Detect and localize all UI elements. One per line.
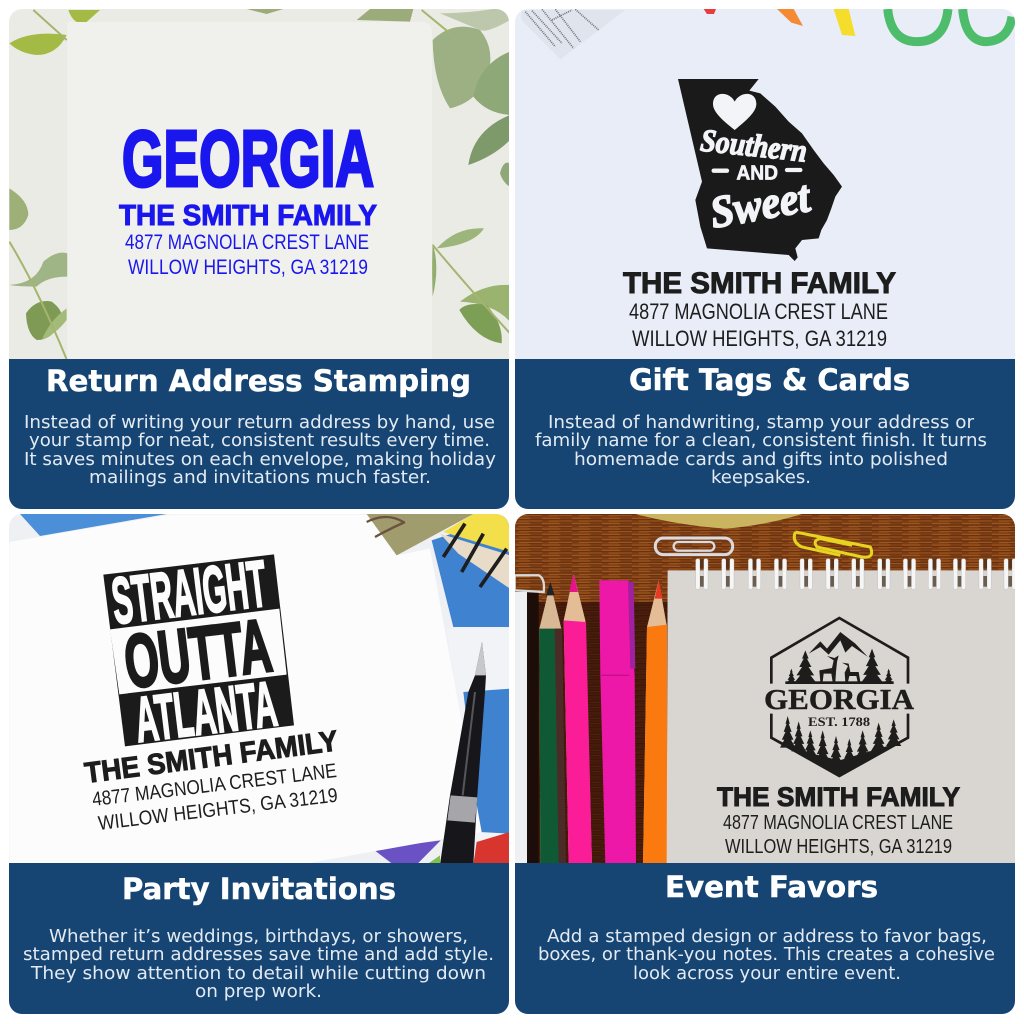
dash marks [712, 168, 802, 173]
word: ATLANTA: ATLANTA [131, 667, 281, 756]
address line 1: 4877 MAGNOLIA CREST LANE [91, 760, 338, 811]
panel: gift tags and cards [515, 9, 1016, 509]
panel: party invitations [9, 514, 510, 1014]
white band [110, 609, 287, 694]
lettering: AND: AND [736, 161, 778, 184]
notebook spiral binding [696, 559, 1016, 589]
description text [24, 412, 496, 488]
description text: boxes, or thank-you notes. This creates a cohesive [538, 944, 995, 965]
family name: THE SMITH FAMILY [717, 782, 960, 812]
stamp artwork: Straight Outta Atlanta [103, 554, 294, 746]
icon: Georgia state stamp with Southern and Sweet [678, 79, 842, 261]
state silhouette [678, 79, 842, 261]
description text: Instead of handwriting, stamp your address or [548, 412, 975, 433]
caption band [515, 359, 1015, 509]
address line 1: 4877 MAGNOLIA CREST LANE [723, 812, 953, 834]
stamp address block [623, 267, 896, 351]
description text: Add a stamped design or address to favor bags, [547, 926, 987, 947]
panel: party invitations: STRAIGHT [108, 546, 271, 638]
address line 2: WILLOW HEIGHTS, GA 31219 [632, 326, 887, 351]
address line 2: WILLOW HEIGHTS, GA 31219 [97, 785, 339, 835]
heading: Gift Tags & Cards [629, 363, 910, 397]
description text [538, 926, 995, 984]
description text: Whether it’s weddings, birthdays, or showers, [49, 926, 468, 947]
address line 2: WILLOW HEIGHTS, GA 31219 [725, 836, 952, 858]
photo: desk with ruler, pens and scissors [515, 9, 1016, 360]
stamp imprint: blue Georgia address [119, 114, 377, 279]
family name: THE SMITH FAMILY [623, 267, 896, 300]
caption band [9, 359, 509, 509]
heading: Event Favors [665, 870, 878, 904]
description text: homemade cards and gifts into polished [574, 449, 948, 470]
description text [535, 412, 987, 488]
lettering: Sweet: Sweet [706, 171, 815, 238]
icon: hexagon mountain and deer badge [771, 618, 908, 777]
hexagon outline [771, 618, 908, 776]
badge word: GEORGIA: GEORGIA [764, 684, 914, 716]
description text: Instead of writing your return address by hand, use [24, 412, 495, 433]
description text: look across your entire event. [633, 963, 901, 984]
lettering: Southern: Southern [699, 122, 809, 169]
black block [103, 554, 294, 746]
stamp address block [83, 725, 340, 835]
description text: They show attention to detail while cutting down [30, 963, 486, 984]
description text: on prep work. [195, 981, 322, 1002]
deer [819, 655, 839, 682]
mountains [809, 632, 868, 657]
description text: It saves minutes on each envelope, making holiday [24, 449, 496, 470]
address line 2: WILLOW HEIGHTS, GA 31219 [128, 256, 368, 279]
panel: event favors [515, 514, 1016, 1014]
photo: envelope on desk with notebooks and pen [9, 514, 510, 865]
family name: THE SMITH FAMILY [119, 200, 377, 232]
description text: mailings and invitations much faster. [89, 467, 431, 488]
photo: wooden desk with pencils, clips and notebook [515, 514, 1016, 865]
photo: envelope on eucalyptus background [9, 9, 510, 360]
badge text: established date: EST. 1788 [808, 714, 871, 729]
address line 1: 4877 MAGNOLIA CREST LANE [125, 231, 369, 254]
word: OUTTA: OUTTA [120, 603, 276, 704]
description text: keepsakes. [711, 467, 811, 488]
caption band [515, 863, 1015, 1014]
description text: family name for a clean, consistent finish. It turns [535, 430, 987, 451]
address line 1: 4877 MAGNOLIA CREST LANE [629, 299, 888, 324]
panel: return address stamping [9, 9, 510, 509]
stamp word: GEORGIA: GEORGIA [122, 114, 374, 203]
family name: THE SMITH FAMILY [83, 725, 340, 790]
pine forest lower [774, 738, 907, 777]
heading: Return Address Stamping [46, 364, 471, 398]
heart [713, 94, 756, 130]
stamp address block [717, 782, 960, 858]
description text: your stamp for neat, consistent results every time. [29, 430, 490, 451]
ground [785, 681, 894, 684]
description text [23, 926, 494, 1002]
caption band [9, 863, 509, 1014]
heading: Party Invitations [122, 872, 396, 906]
description text: stamped return addresses save time and add style. [23, 944, 494, 965]
pine trees upper [794, 650, 817, 684]
